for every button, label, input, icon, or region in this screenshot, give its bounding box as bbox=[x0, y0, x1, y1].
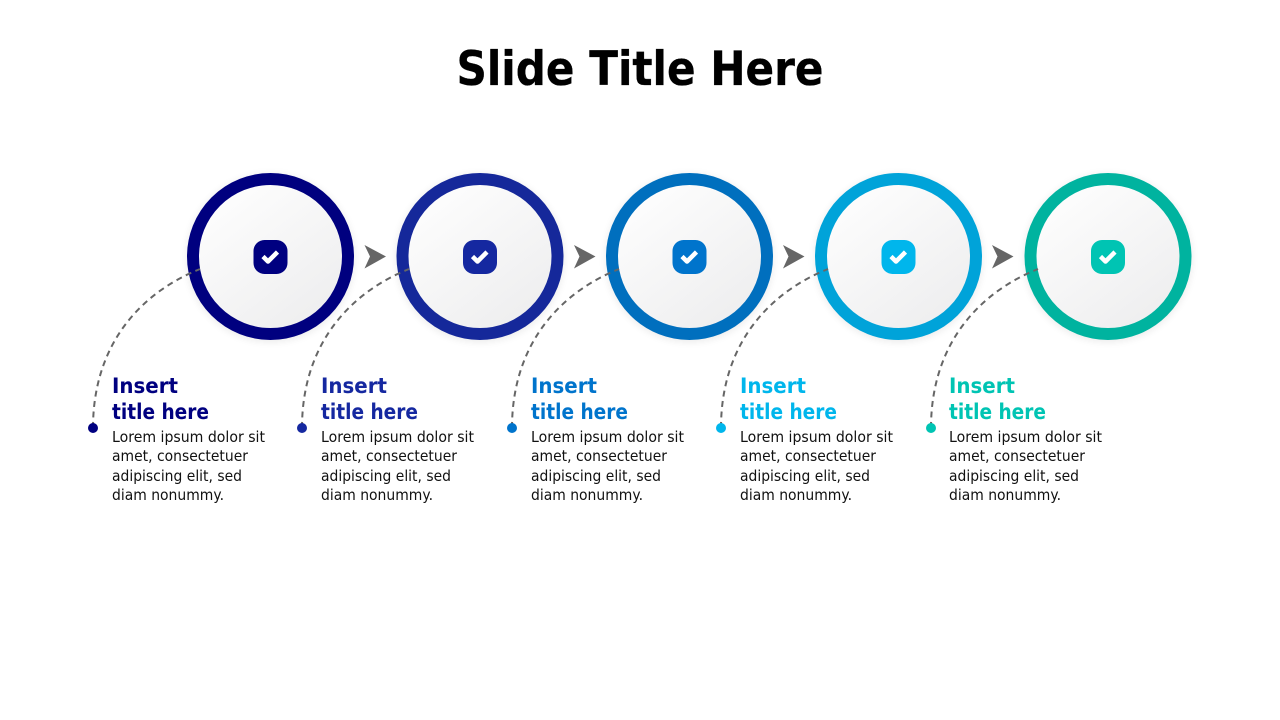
title: Slide Title Here bbox=[456, 42, 824, 97]
step 1 body text: diam nonummy. bbox=[112, 486, 224, 504]
step 3 dashed connector bbox=[507, 269, 619, 433]
arrow 4 bbox=[992, 245, 1014, 268]
step 5 body text: adipiscing elit, sed bbox=[949, 467, 1079, 485]
step 5 body text bbox=[949, 428, 1102, 504]
step 3 heading: title here bbox=[531, 400, 628, 424]
step 2 body text bbox=[321, 428, 474, 504]
step 1 body text: Lorem ipsum dolor sit bbox=[112, 428, 265, 446]
arrow 3 bbox=[783, 245, 804, 268]
step 1 heading bbox=[112, 374, 209, 424]
step 1 heading: title here bbox=[112, 400, 209, 424]
step 4 dashed connector bbox=[716, 269, 828, 433]
step 2 circle bbox=[396, 174, 564, 342]
step 4 body text bbox=[740, 428, 893, 504]
step 2 heading: Insert bbox=[321, 374, 387, 398]
step 4 heading: title here bbox=[740, 400, 837, 424]
step 5 heading bbox=[949, 374, 1046, 424]
step 3 circle bbox=[606, 174, 774, 342]
step 1 body text: amet, consectetuer bbox=[112, 447, 249, 465]
step 5 circle bbox=[1024, 174, 1192, 342]
step 3 body text: adipiscing elit, sed bbox=[531, 467, 661, 485]
step 5 heading: Insert bbox=[949, 374, 1015, 398]
step 2 bbox=[297, 174, 564, 504]
step 3 body text: amet, consectetuer bbox=[531, 447, 668, 465]
step 1 dashed connector bbox=[88, 269, 200, 433]
step 4 heading bbox=[740, 374, 837, 424]
step 1 body text bbox=[112, 428, 265, 504]
step 3 body text: Lorem ipsum dolor sit bbox=[531, 428, 684, 446]
step 4 check icon bbox=[882, 240, 916, 274]
step 1 body text: adipiscing elit, sed bbox=[112, 467, 242, 485]
step 4 circle bbox=[814, 174, 982, 342]
step 1 check icon bbox=[254, 240, 288, 274]
step 3 check icon bbox=[672, 240, 706, 274]
step 4 body text: Lorem ipsum dolor sit bbox=[740, 428, 893, 446]
step 4 heading: Insert bbox=[740, 374, 806, 398]
step 4 body text: amet, consectetuer bbox=[740, 447, 877, 465]
step 5 check icon bbox=[1091, 240, 1125, 274]
step 3 body text bbox=[531, 428, 684, 504]
step 1 heading: Insert bbox=[112, 374, 178, 398]
step 2 body text: diam nonummy. bbox=[321, 486, 433, 504]
step 5 heading: title here bbox=[949, 400, 1046, 424]
step 5 body text: Lorem ipsum dolor sit bbox=[949, 428, 1102, 446]
arrow 2 bbox=[574, 245, 596, 268]
step 4 body text: diam nonummy. bbox=[740, 486, 852, 504]
step 5 body text: amet, consectetuer bbox=[949, 447, 1086, 465]
step 2 dashed connector bbox=[297, 269, 409, 433]
step 2 check icon bbox=[463, 240, 497, 274]
step 2 heading bbox=[321, 374, 418, 424]
step 3 body text: diam nonummy. bbox=[531, 486, 643, 504]
step 4 bbox=[716, 174, 982, 504]
step 3 heading: Insert bbox=[531, 374, 597, 398]
step 2 body text: amet, consectetuer bbox=[321, 447, 458, 465]
step 2 body text: adipiscing elit, sed bbox=[321, 467, 451, 485]
step 2 body text: Lorem ipsum dolor sit bbox=[321, 428, 474, 446]
arrow 1 bbox=[364, 245, 386, 268]
step 4 body text: adipiscing elit, sed bbox=[740, 467, 870, 485]
step 3 bbox=[507, 174, 774, 504]
step 2 heading: title here bbox=[321, 400, 418, 424]
step 1 circle bbox=[186, 174, 354, 342]
step 1 bbox=[88, 174, 354, 504]
step 5 dashed connector bbox=[926, 269, 1038, 433]
step 3 heading bbox=[531, 374, 628, 424]
step 5 body text: diam nonummy. bbox=[949, 486, 1061, 504]
step 5 bbox=[926, 174, 1192, 504]
